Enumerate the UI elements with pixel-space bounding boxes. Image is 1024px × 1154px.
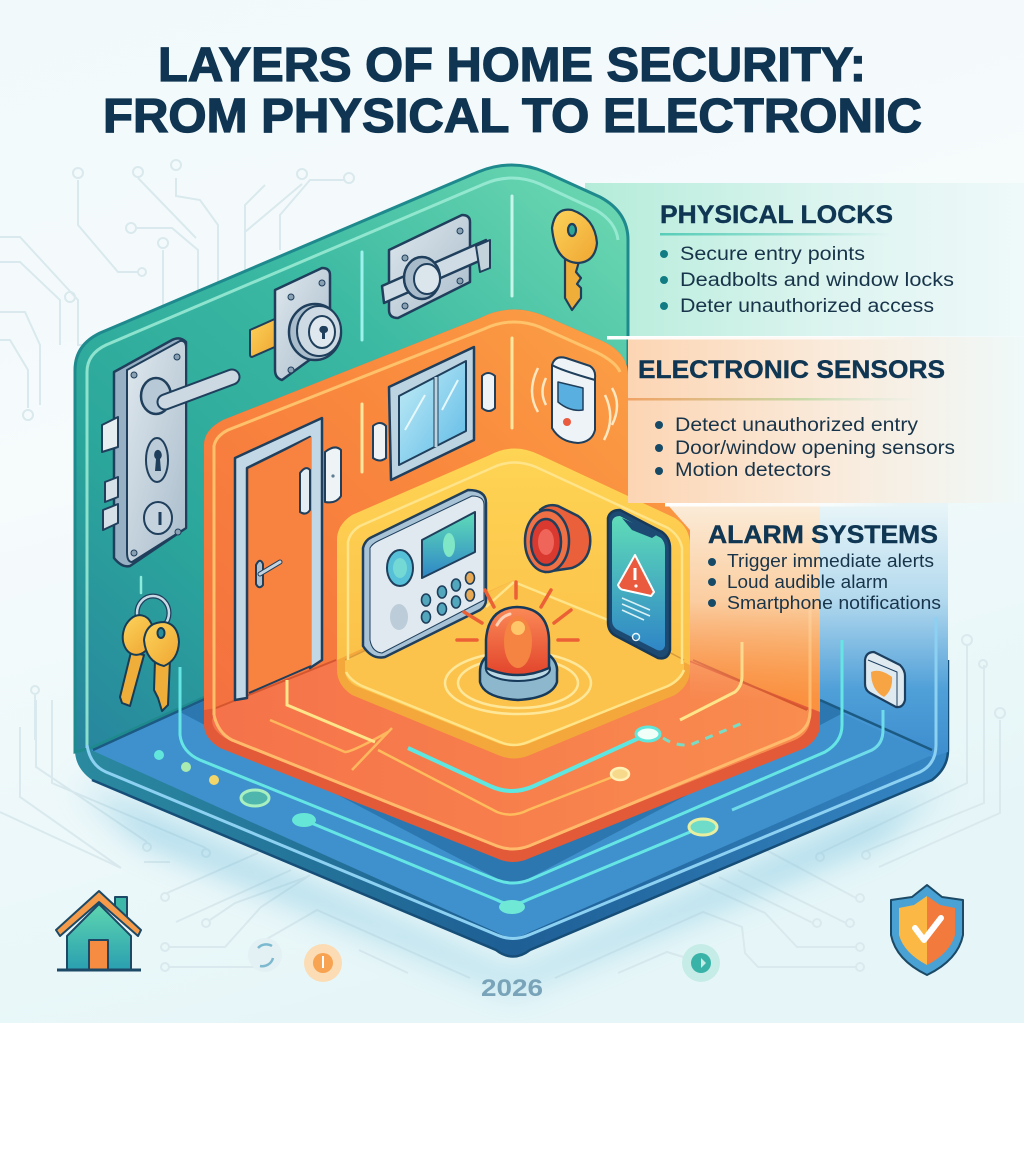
icon: alarm control keypad (363, 490, 486, 658)
icon: gold key (552, 210, 597, 310)
panel: physical locks: Deter unauthorized access (680, 296, 934, 317)
panel backing: physical locks (585, 183, 1024, 336)
background circuit traces (0, 160, 1005, 978)
icon: window with sensors (373, 347, 495, 480)
title: LAYERS OF HOME SECURITY: (158, 39, 866, 92)
title: FROM PHYSICAL TO ELECTRONIC (103, 90, 922, 143)
icon: door with contact sensor (235, 418, 341, 700)
panel: electronic sensors: Motion detectors (675, 460, 831, 481)
panel: electronic sensors (607, 336, 1024, 503)
orange floor surface (212, 590, 810, 849)
icon: shield with check (891, 885, 963, 975)
darker inner floor band (180, 560, 845, 882)
small wall sensor on right (865, 652, 905, 707)
icon: sliding latch (382, 215, 490, 318)
floor status dots (154, 750, 717, 914)
title (103, 39, 922, 143)
panel: alarm systems: ALARM SYSTEMS (708, 521, 938, 549)
panel: alarm systems: Smartphone notifications (727, 593, 941, 613)
icon: motion detector (532, 357, 617, 443)
panel: physical locks: PHYSICAL LOCKS (660, 201, 893, 229)
icon: house (56, 891, 141, 970)
year label: 2026 (481, 975, 543, 1002)
icon: smartphone alert (608, 510, 670, 658)
panel: alarm systems: Trigger immediate alerts (727, 551, 934, 571)
icon: flashing beacon (445, 582, 591, 714)
floor surface (91, 560, 932, 937)
panel: electronic sensors: Detect unauthorized entry (675, 415, 919, 436)
panel: physical locks: Deadbolts and window locks (680, 270, 954, 291)
orange floor glow lines (214, 610, 810, 849)
icon: deadbolt (250, 268, 341, 380)
floor circuit lines (87, 617, 936, 938)
drop shadow (75, 780, 948, 990)
panel: electronic sensors: Door/window opening sensors (675, 438, 955, 459)
layer: orange electronic sensors (204, 309, 820, 862)
wall highlights (141, 196, 512, 593)
panel: electronic sensors: ELECTRONIC SENSORS (638, 356, 945, 384)
panel: physical locks: Secure entry points (680, 244, 865, 265)
icon: door handle lock plate (102, 338, 232, 566)
panel: alarm systems (665, 503, 941, 700)
footer status glyphs (248, 938, 720, 982)
icon: pair of keys (119, 596, 179, 711)
panel: physical locks (660, 201, 954, 317)
layer: outer physical house shell (75, 165, 948, 956)
panel: alarm systems: Loud audible alarm (727, 572, 888, 592)
layer: yellow alarm core (337, 448, 690, 758)
icon: audible sounder (525, 505, 590, 572)
